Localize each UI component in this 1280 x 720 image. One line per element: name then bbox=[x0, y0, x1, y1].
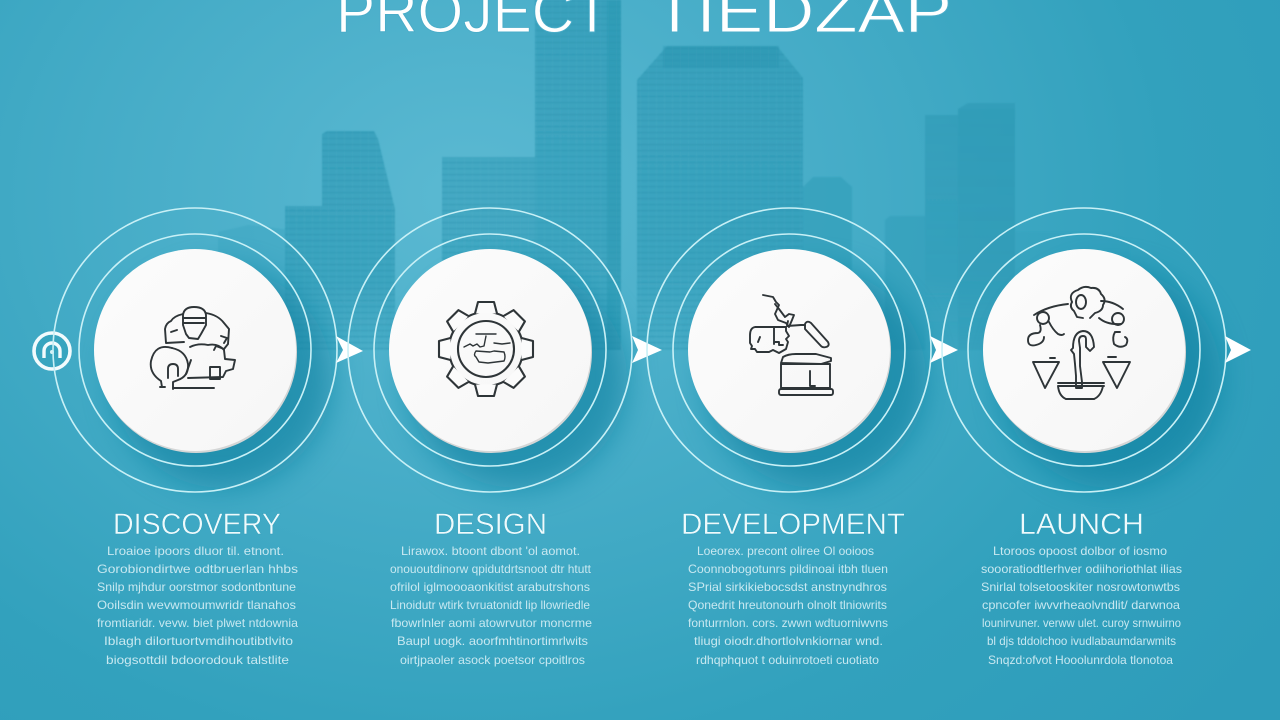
shadow bbox=[1001, 268, 1221, 488]
body text bbox=[390, 544, 592, 667]
body text: Snilp mjhdur oorstmor sodontbntune bbox=[97, 580, 296, 594]
body text: biogsottdil bdoorodouk talstlite bbox=[106, 653, 289, 667]
body text: Coonnobogotunrs pildinoai itbh tluen bbox=[688, 562, 888, 576]
title bbox=[336, 0, 952, 45]
step 1: discovery circle bbox=[53, 208, 363, 492]
body text: Baupl uogk. aoorfmhtinortimrlwits bbox=[397, 634, 588, 648]
body text: Iblagh dilortuortvmdihoutibtlvito bbox=[104, 634, 293, 648]
icon: tools and box bbox=[750, 295, 833, 395]
icon: gear bbox=[439, 302, 533, 396]
white disk bbox=[689, 251, 891, 453]
body text: Loeorex. precont oliree Ol ooioos bbox=[697, 544, 874, 558]
arrow bbox=[1225, 336, 1251, 363]
body text: Lirawox. btoont dbont 'ol aomot. bbox=[401, 544, 580, 558]
body text: fonturrnlon. cors. zwwn wdtuorniwvns bbox=[688, 616, 888, 630]
body text: Snqzd:ofvot Hooolunrdola tlonotoa bbox=[988, 653, 1173, 667]
outer ring bbox=[647, 208, 931, 492]
shadow bbox=[112, 268, 332, 488]
body text: lounirvuner. verww ulet. curoy srnwuirno bbox=[982, 616, 1181, 630]
body text: Ltoroos opoost dolbor of iosmo bbox=[993, 544, 1167, 558]
start marker icon bbox=[34, 333, 70, 369]
body text: Ooilsdin wevwmoumwridr tlanahos bbox=[97, 598, 296, 612]
step 3: development circle bbox=[647, 208, 958, 492]
white disk bbox=[390, 251, 592, 453]
step 2: design circle bbox=[348, 208, 662, 492]
body text: onououtdinorw qpidutdrtsnoot dtr htutt bbox=[390, 562, 592, 576]
body text: tliugi oiodr.dhortlolvnkiornar wnd. bbox=[694, 634, 883, 648]
outer ring bbox=[942, 208, 1226, 492]
heading: DESIGN bbox=[434, 508, 547, 541]
outer ring bbox=[348, 208, 632, 492]
panel: discovery text bbox=[97, 508, 298, 667]
icon: engineer bbox=[151, 307, 235, 389]
body text: soooratiodtlerhver odiihoriothlat ilias bbox=[981, 562, 1182, 576]
panel: development text bbox=[681, 508, 905, 667]
body text: Lroaioe ipoors dluor til. etnont. bbox=[107, 544, 284, 558]
body text: rdhqphquot t oduinrotoeti cuotiato bbox=[696, 653, 879, 667]
body text: fbowrlnler aomi atowrvutor moncrme bbox=[391, 616, 592, 630]
panel: design text bbox=[390, 508, 592, 667]
shadow bbox=[706, 268, 926, 488]
heading: LAUNCH bbox=[1019, 508, 1144, 541]
body text: oirtjpaoler asock poetsor cpoitlros bbox=[400, 653, 585, 667]
body text: SPrial sirkikiebocsdst anstnyndhros bbox=[688, 580, 887, 594]
outer ring bbox=[53, 208, 337, 492]
shadow bbox=[407, 268, 627, 488]
body text: cpncofer iwvvrheaolvndlit/ darwnoa bbox=[982, 598, 1180, 612]
body text: Gorobiondirtwe odtbruerlan hhbs bbox=[97, 562, 298, 576]
panel: launch text bbox=[981, 508, 1182, 667]
body text: ofrilol iglmoooaonkitist arabutrshons bbox=[390, 580, 590, 594]
body text bbox=[981, 544, 1182, 667]
body text: Linoidutr wtirk tvruatonidt lip llowriedle bbox=[390, 598, 590, 612]
white disk bbox=[95, 251, 297, 453]
icon: balance scale bbox=[1028, 287, 1130, 399]
white disk bbox=[984, 251, 1186, 453]
body text bbox=[688, 544, 888, 667]
body text: bl djs tddolchoo ivudlabaumdarwmits bbox=[987, 634, 1176, 648]
body text bbox=[97, 544, 298, 667]
city skyline bbox=[218, 0, 1130, 350]
heading: DEVELOPMENT bbox=[681, 508, 905, 541]
inner ring bbox=[673, 234, 905, 466]
inner ring bbox=[374, 234, 606, 466]
heading: DISCOVERY bbox=[113, 508, 281, 541]
arrow bbox=[930, 336, 958, 363]
body text: Snirlal tolsetooskiter nosrowtonwtbs bbox=[981, 580, 1180, 594]
arrow bbox=[336, 336, 363, 363]
step 4: launch circle bbox=[942, 208, 1251, 492]
body text: fromtiaridr. vevw. biet plwet ntdownia bbox=[97, 616, 298, 630]
inner ring bbox=[79, 234, 311, 466]
body text: Qonedrit hreutonourh olnolt tlniowrits bbox=[688, 598, 887, 612]
arrow bbox=[632, 336, 662, 363]
inner ring bbox=[968, 234, 1200, 466]
